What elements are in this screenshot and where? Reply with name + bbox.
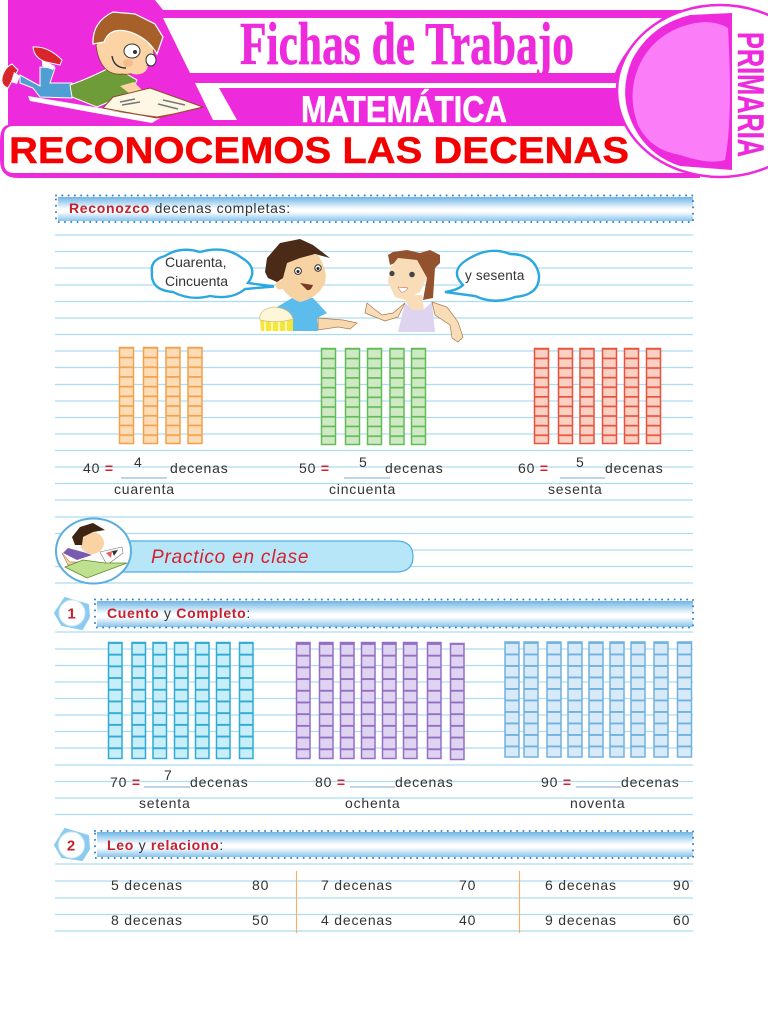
row 1: 70 [459,877,476,893]
equation: 90 [541,774,680,811]
title: Fichas de Trabajo: Fichas de Trabajo [240,11,574,77]
shirt [63,548,92,560]
equation: 40: 40 = [83,460,114,476]
row 1: 80 [252,877,269,893]
subject: Matemática: MATEMÁTICA [301,89,507,130]
speech bubble: y sesenta [445,251,539,301]
main title: RECONOCEMOS LAS DECENAS [9,130,629,171]
badge: 1: 1 [67,606,76,622]
equation: 90: 90 = [541,774,572,790]
hair [93,12,163,54]
open book [65,560,127,578]
upright book [100,547,123,565]
primaria badge dark shape [625,13,732,170]
equation: 50: decenas [385,460,444,476]
badge: 2: 2 [67,838,75,854]
row 2: 9 decenas [545,912,617,928]
face details [124,44,140,58]
section bar: Leo y relaciono [95,831,693,858]
upper shoe [33,47,62,65]
lower shoe [2,64,18,88]
ruled notebook lines [55,235,693,931]
eyes and smile [389,271,395,276]
blocks: 9 blue tens [505,642,692,757]
equation: 40: cuarenta [114,481,175,497]
hair [388,250,440,300]
blocks: 7 cyan tens [108,642,253,758]
equation: 50: 5 [359,454,368,470]
matching table [111,871,690,933]
equation: 60: 5 [576,454,585,470]
practico en clase band [56,518,413,584]
arm [130,64,148,74]
face [280,254,326,302]
icon: boy with popcorn [260,239,357,331]
head [96,25,154,74]
shirt [277,298,327,331]
equation: 80 [315,774,454,811]
hair [72,523,105,545]
equation: 60: decenas [605,460,664,476]
banner white title panel [163,18,662,73]
section bar: Reconozco: Reconozco decenas completas: [69,200,291,216]
icon: boy reading [2,12,203,123]
practico en clase band: Practico en clase [151,547,309,568]
blocks: 4 orange tens [120,348,202,444]
row 2: 8 decenas [111,912,183,928]
dress [398,302,435,332]
equation: 70: 70 = [110,774,141,790]
blocks: 8 purple tens [296,642,464,760]
equation: 80: ochenta [345,795,400,811]
speech bubble: y sesenta: y sesenta [465,268,525,283]
section bar: Reconozco [56,196,693,222]
icon: girl [365,250,463,342]
row 2: 40 [459,912,476,928]
section bar: Leo y relaciono: Leo y relaciono: [107,837,224,853]
face [80,532,104,554]
equation: 80: decenas [395,774,454,790]
neck [404,295,424,311]
arm [318,318,357,330]
popcorn bucket [260,319,293,331]
white shadow [28,96,160,123]
blocks: 5 green tens [322,348,426,444]
speech bubble: Cuarenta, Cincuenta: Cuarenta, [165,254,226,270]
book [103,88,203,118]
header banner [0,0,768,178]
icon: boy reading in circle [56,518,131,584]
section bar: Cuento y Completo [95,600,693,628]
legs [20,67,72,98]
hair [265,239,330,282]
arm [62,553,84,565]
equation: 70 [110,767,249,811]
equation: 60 [518,454,664,497]
row 1: 6 decenas [545,877,617,893]
equation: 50: cincuenta [329,481,396,497]
column dividers [296,871,520,933]
equation: 40 [83,454,229,497]
torso [70,66,137,107]
primaria badge light blob [633,22,730,162]
primaria badge circle [617,5,768,177]
row 1: 90 [673,877,690,893]
speech bubble: Cuarenta, Cincuenta: Cincuenta [165,273,228,289]
speech bubble: Cuarenta, Cincuenta [152,250,274,298]
eyes and mouth [295,268,301,274]
face [388,258,427,300]
row 1: 7 decenas [321,877,393,893]
equation: 70: 7 [164,767,173,783]
equation: 80: 80 = [315,774,346,790]
equation: 50: 50 = [299,460,330,476]
title box [4,126,700,173]
equation: 40: 4 [134,454,143,470]
banner white stripe [195,83,630,120]
row 1: 5 decenas [111,877,183,893]
row 2: 60 [673,912,690,928]
blocks: 6 red tens [534,348,660,444]
equation: 70: decenas [190,774,249,790]
equation: 70: setenta [139,795,191,811]
row 2: 50 [252,912,269,928]
badge: 2 [55,829,89,860]
row 1 [111,877,690,893]
banner pink background [0,0,700,178]
equation: 90: noventa [570,795,625,811]
equation: 40: decenas [170,460,229,476]
equation: 90: decenas [621,774,680,790]
badge: 1 [55,598,89,629]
row 2 [111,912,690,928]
arms [365,303,405,321]
section bar: Cuento y Completo: Cuento y Completo: [107,605,251,621]
row 2: 4 decenas [321,912,393,928]
equation: 60: 60 = [518,460,549,476]
equation: 60: sesenta [548,481,603,497]
equation: 50 [299,454,444,497]
